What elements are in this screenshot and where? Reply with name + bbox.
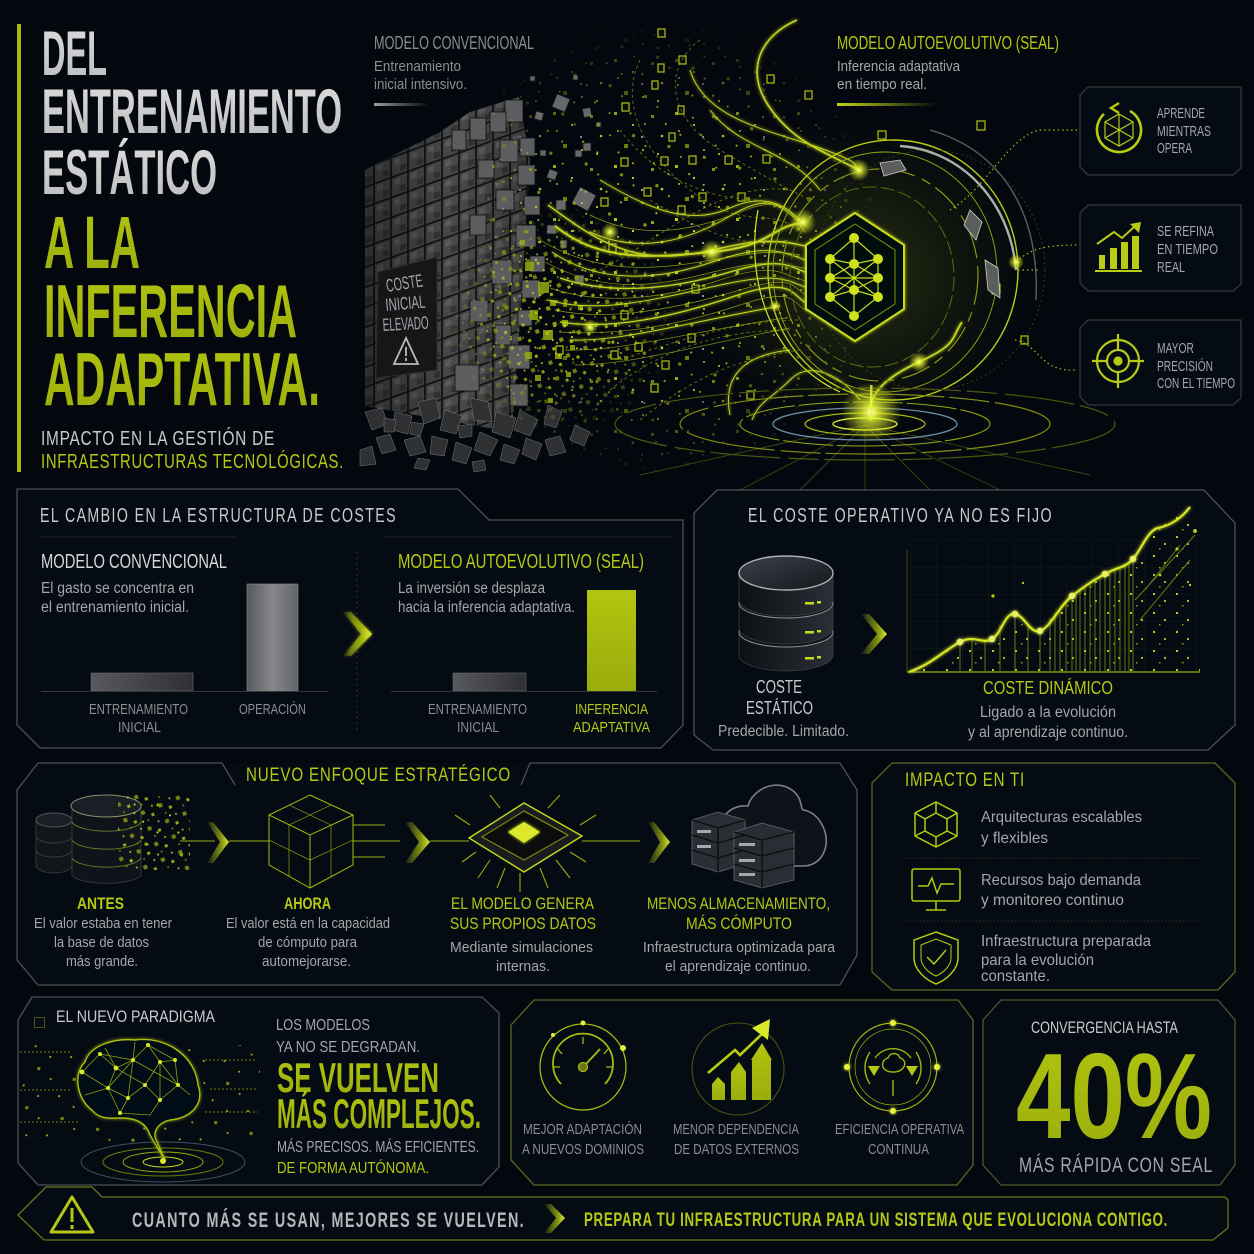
title line: yellow: A LA <box>44 201 140 284</box>
dynamic cost label: Ligado a la evolución <box>980 704 1116 721</box>
warning sign on wall: INICIAL <box>385 292 426 315</box>
icon: database stack <box>739 556 833 671</box>
warning sign on wall: COSTE <box>384 270 424 296</box>
benefit: better adaptation <box>522 1020 644 1158</box>
flowing data streams <box>548 20 962 420</box>
card: se refina en tiempo real <box>1080 205 1241 291</box>
paradigm statement: SE VUELVEN <box>277 1054 439 1101</box>
dynamic cost label: COSTE DINÁMICO <box>983 678 1113 698</box>
benefit: continuous efficiency: EFICIENCIA OPERATIVA <box>835 1121 964 1138</box>
column: conventional model: el entrenamiento inicial. <box>41 599 189 616</box>
step: ahora <box>226 795 430 970</box>
column: SEAL model: INFERENCIA <box>575 701 648 718</box>
step: menos almacenamiento: MÁS CÓMPUTO <box>686 914 792 933</box>
dotted connectors to cards <box>950 130 1078 370</box>
panel: impact on IT <box>872 763 1235 990</box>
hero label: SEAL model <box>837 33 1059 106</box>
card: mayor precisión <box>1080 320 1241 405</box>
arrow <box>544 1204 565 1233</box>
hexagon network emblem <box>806 213 904 341</box>
icon: learning loop <box>1089 100 1149 160</box>
panel heading: EL NUEVO PARADIGMA <box>56 1007 216 1026</box>
hero label: conventional model <box>374 33 534 106</box>
card: se refina en tiempo real: SE REFINA <box>1157 224 1214 240</box>
hero label: SEAL model: MODELO AUTOEVOLUTIVO (SEAL) <box>837 33 1059 53</box>
item: scalable architectures: Arquitecturas escalables <box>981 809 1142 826</box>
panel: 40% convergence: CONVERGENCIA HASTA <box>1031 1018 1178 1037</box>
big number: 40% <box>1016 1028 1212 1164</box>
column: conventional model: MODELO CONVENCIONAL <box>41 551 227 573</box>
item: ready infrastructure: para la evolución <box>981 952 1094 969</box>
benefit: better adaptation: A NUEVOS DOMINIOS <box>522 1141 644 1158</box>
benefit: less dependence: MENOR DEPENDENCIA <box>673 1121 799 1138</box>
benefit: better adaptation: MEJOR ADAPTACIÓN <box>523 1121 642 1138</box>
paradigm statement: MÁS COMPLEJOS. <box>277 1090 481 1137</box>
subtitle <box>41 427 344 473</box>
paradigm statement <box>276 1017 481 1177</box>
hero label: conventional model: MODELO CONVENCIONAL <box>374 33 534 53</box>
divider lines <box>40 536 672 538</box>
concrete wall <box>365 75 601 432</box>
column: SEAL model: MODELO AUTOEVOLUTIVO (SEAL) <box>398 551 644 573</box>
small marker <box>34 1018 44 1028</box>
item: ready infrastructure: constante. <box>981 968 1050 985</box>
icon: wireframe cube <box>269 795 353 888</box>
column: SEAL model: La inversión se desplaza <box>398 580 545 597</box>
warning sign on wall: ELEVADO <box>382 313 429 335</box>
item: ready infrastructure <box>914 932 1151 985</box>
column: SEAL model <box>391 551 657 736</box>
static cost label: Predecible. Limitado. <box>718 723 849 740</box>
paradigm statement: YA NO SE DEGRADAN. <box>276 1039 420 1056</box>
card: mayor precisión: MAYOR <box>1157 341 1194 357</box>
paradigm statement: MÁS PRECISOS. MÁS EFICIENTES. <box>277 1137 479 1156</box>
paradigm statement: DE FORMA AUTÓNOMA. <box>277 1158 429 1177</box>
item: scalable architectures <box>915 802 1142 847</box>
benefit: continuous efficiency <box>835 1020 964 1158</box>
extra fine strands <box>540 204 812 365</box>
panel: 40% convergence <box>983 1000 1235 1185</box>
accent bar <box>17 24 21 472</box>
panel heading: EL CAMBIO EN LA ESTRUCTURA DE COSTES <box>40 505 397 527</box>
small data squares <box>556 29 1028 399</box>
bottom banner <box>18 1187 1228 1240</box>
hero illustration: wall dissolving into adaptive core <box>360 20 1115 490</box>
title line: grey: ENTRENAMIENTO <box>42 77 342 147</box>
title line: grey <box>42 19 342 208</box>
warning sign on wall <box>376 257 437 378</box>
column: conventional model: OPERACIÓN <box>239 701 306 718</box>
panel heading: NUEVO ENFOQUE ESTRATÉGICO <box>246 765 511 786</box>
step: ahora: de cómputo para <box>258 934 358 951</box>
hero label: SEAL model: Inferencia adaptativa <box>837 59 961 75</box>
particle cloud <box>451 28 872 473</box>
panel: cost structure <box>17 489 683 748</box>
benefit: continuous efficiency: CONTINUA <box>868 1141 929 1158</box>
panel: strategic focus <box>17 763 857 985</box>
paradigm statement: LOS MODELOS <box>276 1017 370 1034</box>
item: on demand resources <box>912 869 1141 910</box>
column: conventional model: El gasto se concentra en <box>41 580 194 597</box>
step: ahora: El valor está en la capacidad <box>226 915 390 932</box>
hero label: SEAL model: en tiempo real. <box>837 77 927 93</box>
ring hardware fragments <box>880 160 1000 298</box>
rubble pile <box>360 398 590 472</box>
step: antes: ANTES <box>77 894 124 913</box>
step: el modelo genera: SUS PROPIOS DATOS <box>450 914 596 933</box>
arrow between models <box>343 552 372 730</box>
step: el modelo genera: internas. <box>496 958 550 975</box>
step: menos almacenamiento <box>643 785 836 975</box>
title line: grey: ESTÁTICO <box>42 138 217 208</box>
chart: dynamic cost <box>907 507 1200 672</box>
panel: operating cost <box>694 490 1235 750</box>
icon: glowing chip <box>430 795 640 892</box>
holographic ground rings <box>615 388 1115 490</box>
column: SEAL model: INICIAL <box>457 719 499 736</box>
title line: yellow: INFERENCIA <box>44 269 297 353</box>
column: conventional model <box>41 551 328 736</box>
dynamic cost label: y al aprendizaje continuo. <box>968 724 1128 741</box>
card: aprende mientras opera: APRENDE <box>1157 106 1205 122</box>
bright light points <box>582 159 1024 442</box>
bottom banner: CUANTO MÁS SE USAN, MEJORES SE VUELVEN. <box>132 1209 525 1232</box>
step: el modelo genera <box>430 795 670 975</box>
step: el modelo genera: EL MODELO GENERA <box>451 894 595 913</box>
static cost label: ESTÁTICO <box>746 698 813 718</box>
item: on demand resources: y monitoreo continuo <box>981 892 1124 909</box>
card: mayor precisión: PRECISIÓN <box>1157 358 1213 375</box>
panel: benefits <box>511 1000 973 1185</box>
step: antes: la base de datos <box>54 934 149 951</box>
subtitle: INFRAESTRUCTURAS TECNOLÓGICAS. <box>41 450 344 473</box>
item: scalable architectures: y flexibles <box>981 830 1048 847</box>
illustration: neural brain <box>20 1039 260 1182</box>
subtitle: IMPACTO EN LA GESTIÓN DE <box>41 427 275 450</box>
title line: yellow: ADAPTATIVA. <box>44 337 320 421</box>
benefit: less dependence: DE DATOS EXTERNOS <box>674 1141 799 1158</box>
step: antes: más grande. <box>66 953 138 970</box>
step: ahora: automejorarse. <box>262 953 351 970</box>
static cost label <box>718 677 849 740</box>
glow behind core <box>670 100 1050 450</box>
item: on demand resources: Recursos bajo demanda <box>981 872 1141 889</box>
column: SEAL model: ADAPTATIVA <box>573 719 650 736</box>
thin dashed arcs <box>600 40 810 420</box>
column: SEAL model: hacia la inferencia adaptativa. <box>398 599 575 616</box>
step: antes <box>34 795 229 970</box>
dynamic cost label <box>968 678 1128 741</box>
card: se refina en tiempo real: REAL <box>1157 260 1185 276</box>
card: aprende mientras opera: OPERA <box>1157 141 1192 157</box>
icon: databases dissolving <box>36 795 215 883</box>
panel heading: EL COSTE OPERATIVO YA NO ES FIJO <box>748 505 1053 527</box>
static cost label: COSTE <box>756 677 802 697</box>
icon: cloud servers <box>692 785 826 888</box>
title line: yellow <box>44 201 320 421</box>
hero label: conventional model: inicial intensivo. <box>374 77 467 93</box>
column: conventional model: INICIAL <box>118 719 161 736</box>
step: antes: El valor estaba en tener <box>34 915 172 932</box>
step: menos almacenamiento: Infraestructura optimizada para <box>643 939 836 956</box>
icon: warning triangle <box>51 1197 93 1232</box>
title <box>42 19 342 421</box>
card: aprende mientras opera: MIENTRAS <box>1157 124 1211 140</box>
icon: rising bars <box>1095 222 1142 272</box>
step: el modelo genera: Mediante simulaciones <box>450 939 593 956</box>
column: SEAL model: ENTRENAMIENTO <box>428 701 527 718</box>
column: conventional model: ENTRENAMIENTO <box>89 701 188 718</box>
hero label: conventional model: Entrenamiento <box>374 59 461 75</box>
item: ready infrastructure: Infraestructura preparada <box>981 933 1151 950</box>
card: aprende mientras opera <box>1080 87 1241 175</box>
step: ahora: AHORA <box>284 894 331 913</box>
title line: grey: DEL <box>42 19 107 89</box>
step: menos almacenamiento: MENOS ALMACENAMIENTO, <box>647 894 830 913</box>
panel: new paradigm <box>18 997 499 1185</box>
arrow <box>861 614 887 654</box>
step: menos almacenamiento: el aprendizaje continuo. <box>665 958 811 975</box>
card: se refina en tiempo real: EN TIEMPO <box>1157 242 1218 258</box>
concentric rings of the core <box>755 130 1045 400</box>
benefit: less dependence <box>673 1019 799 1158</box>
panel heading: IMPACTO EN TI <box>905 770 1025 791</box>
icon: target <box>1092 334 1144 388</box>
